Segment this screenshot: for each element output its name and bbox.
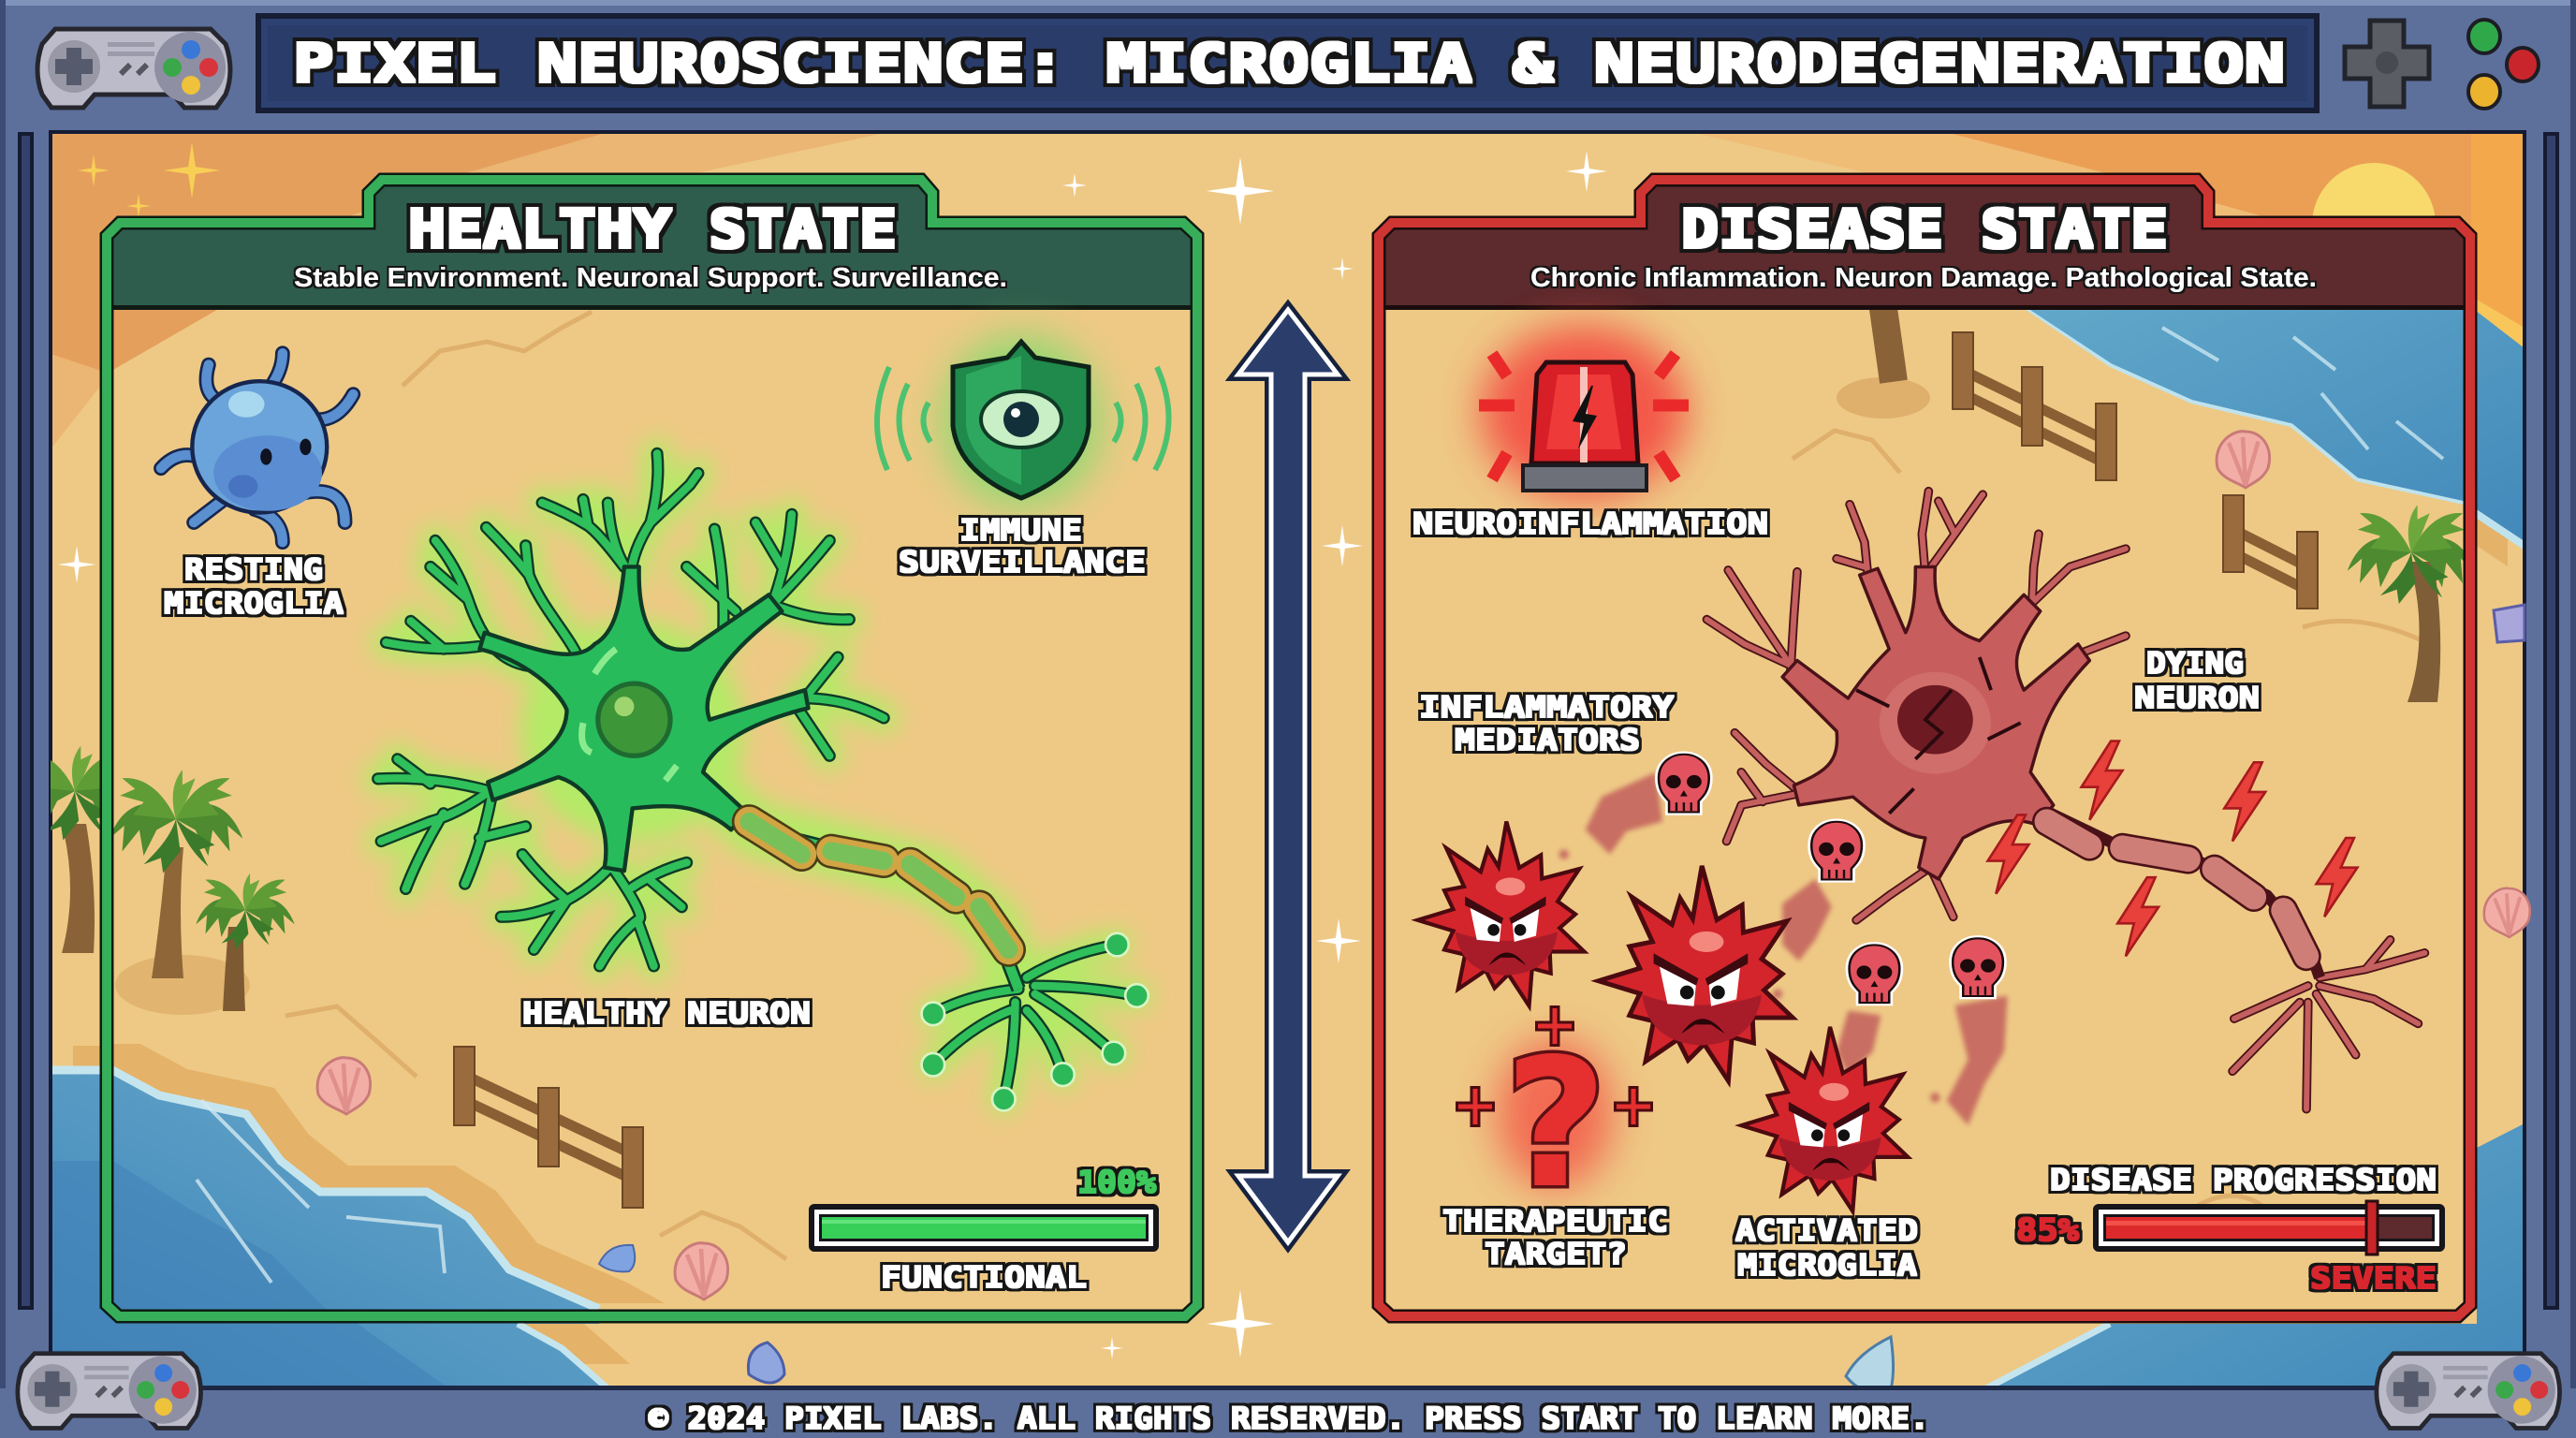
bottom-left controller [18,1354,201,1429]
functional status bar [811,1164,1157,1295]
fence [454,1047,643,1208]
label: dying neuron: NEURON [2134,682,2260,715]
healthy neuron [378,453,1149,1110]
label: inflammatory mediators [1419,691,1674,757]
label: activated microglia: ACTIVATED [1735,1214,1918,1248]
label: resting microglia: RESTING [184,553,323,587]
top-left controller [37,29,230,108]
label: therapeutic target: TARGET? [1485,1238,1627,1271]
disease progression bar: 85% [2016,1211,2079,1248]
skulls: inflammatory mediators [1659,755,2003,1003]
panel: healthy state [51,180,1197,1329]
panel body [113,307,1191,1311]
shells and rock [317,1058,728,1299]
functional status bar: FUNCTIONAL [881,1261,1087,1295]
heading: disease state: DISEASE STATE [1681,199,2168,260]
lightning bolts [1988,741,2357,956]
disease progression bar: SEVERE [2310,1262,2437,1296]
footer text: © 2024 PIXEL LABS. ALL RIGHTS RESERVED. PRESS START TO LEARN MORE. [649,1401,1929,1436]
fences [1953,332,2318,609]
icon: immune surveillance shield [877,335,1169,507]
functional status bar: 100% [1077,1164,1156,1200]
bottom-right controller [2377,1354,2560,1429]
icon: siren [1479,326,1689,498]
double-headed arrow [1238,310,1338,1242]
label: immune surveillance: SURVEILLANCE [899,546,1146,580]
subtitle: Stable Environment. Neuronal Support. Surveillance. [294,263,1007,293]
panel: disease state [1379,180,2475,1316]
left off-panel palm [51,745,99,953]
label: activated microglia [1735,1214,1918,1283]
icon: therapeutic target question mark [1456,1005,1653,1227]
panel frame [1385,185,2464,307]
icon: colored buttons [2468,20,2539,109]
shell [2217,432,2270,488]
palm trees [110,770,295,1015]
sand and shells outside panels [748,605,2530,1395]
label: neuroinflammation: NEUROINFLAMMATION [1412,507,1768,541]
label: immune surveillance [899,514,1146,580]
title bar [258,16,2317,110]
icon: d-pad [2345,21,2429,107]
left panel beach [114,310,788,1309]
label: therapeutic target: THERAPEUTIC [1442,1205,1668,1239]
title: PIXEL NEUROSCIENCE: MICROGLIA & NEURODEGENERATION [293,34,2285,95]
label: activated microglia: MICROGLIA [1737,1249,1917,1283]
label: resting microglia [164,553,344,621]
label: resting microglia: MICROGLIA [164,587,344,621]
label: healthy neuron: HEALTHY NEURON [522,997,811,1031]
heading: healthy state: HEALTHY STATE [408,199,897,260]
icon: resting microglia [161,353,353,542]
label: dying neuron: DYING [2146,647,2244,681]
panel frame [113,185,1191,307]
dying neuron [1706,492,2424,1109]
label: immune surveillance: IMMUNE [959,514,1082,548]
disease progression bar: DISEASE PROGRESSION [2050,1164,2437,1197]
subtitle: Chronic Inflammation. Neuron Damage. Pathological State. [1530,263,2317,293]
footer band [0,1386,2576,1438]
smoke trails [1559,772,2008,1125]
label: inflammatory mediators: INFLAMMATORY [1419,691,1674,725]
right panel beach [1793,305,2475,1217]
disease progression bar [2016,1164,2443,1296]
panel body [1385,307,2464,1311]
label: therapeutic target [1442,1205,1668,1271]
icon: therapeutic target question mark: ? [1504,1020,1607,1227]
label: dying neuron [2134,647,2260,715]
label: inflammatory mediators: MEDIATORS [1455,724,1640,757]
activated microglia [1418,822,1908,1211]
sparkles [58,142,1607,1359]
